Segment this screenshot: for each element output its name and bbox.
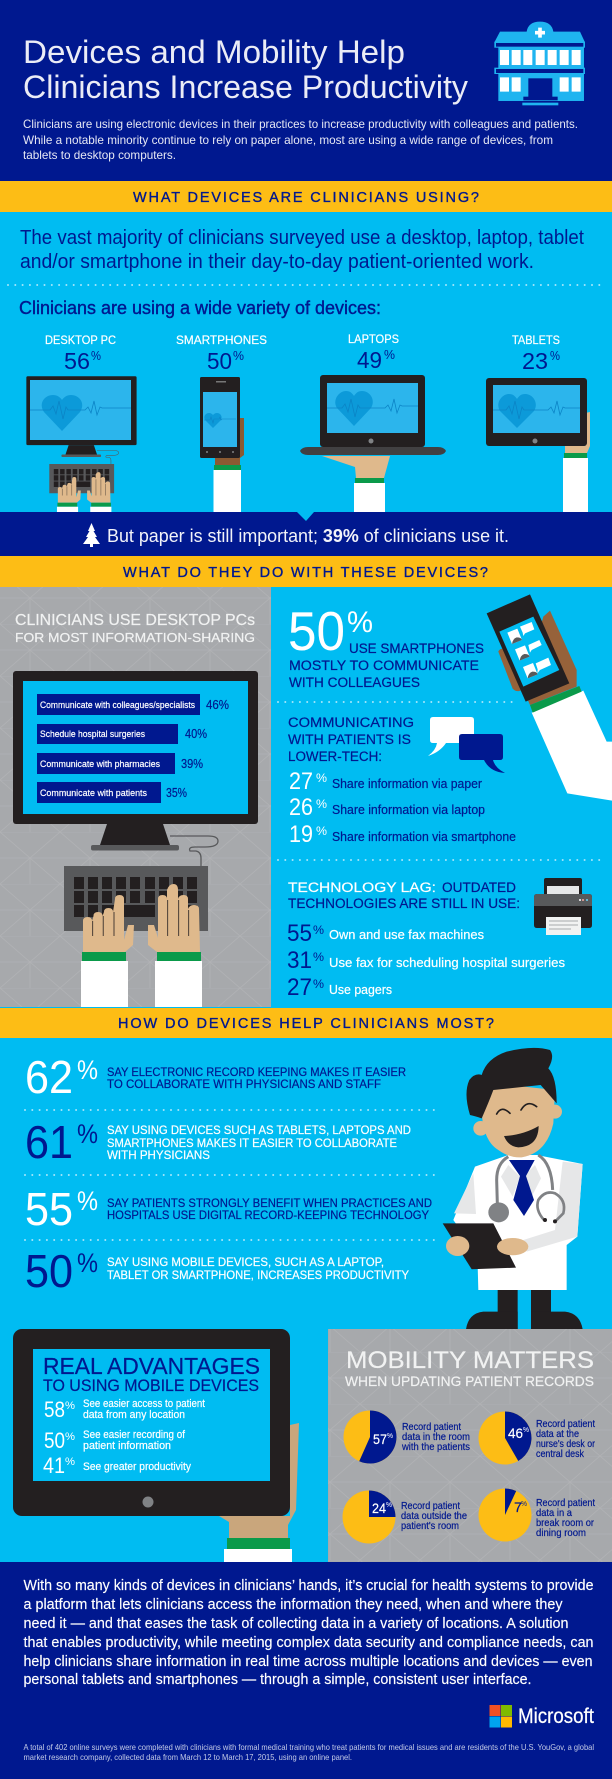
pie chart: break room: Record patient <box>536 1497 595 1509</box>
stats: patient communication: Share information via smartphone <box>332 830 516 844</box>
bar chart: 46% <box>206 698 229 712</box>
block: technology lag <box>287 878 592 1001</box>
stats: advantages: % <box>65 1400 75 1412</box>
pie chart: at the desk: % <box>523 1427 529 1434</box>
label: smartphones: 50 <box>207 348 232 374</box>
illustration: desktop with keyboard <box>26 376 137 527</box>
icon: speech bubbles <box>428 717 505 773</box>
pie chart: at the desk: 46 <box>508 1425 523 1441</box>
bar chart: Communicate with patients <box>40 788 147 799</box>
block: communicating with patients <box>288 715 516 848</box>
pie chart: outside the room: % <box>386 1502 392 1509</box>
label: laptops <box>348 332 399 373</box>
stats: patient communication: % <box>316 824 327 838</box>
heading: desktop pcs: FOR MOST INFORMATION-SHARING <box>15 631 255 645</box>
stat: fifty percent: SAY USING MOBILE DEVICES, SUCH AS A LAPTOP, <box>107 1255 384 1269</box>
title <box>23 34 469 105</box>
icon: fax machine <box>534 878 592 935</box>
intro text: tablets to desktop computers. <box>23 148 176 162</box>
footnote <box>24 1742 594 1762</box>
stats: advantages: % <box>65 1456 75 1468</box>
pie chart: in the room: with the patients <box>401 1441 470 1453</box>
bar chart: Communicate with colleagues/specialists <box>40 700 195 711</box>
bar chart <box>37 694 229 803</box>
label: tablets: TABLETS <box>512 333 560 347</box>
lead statement: and/or smartphone in their day-to-day patient-oriented work. <box>20 250 534 273</box>
pie chart: at the desk: Record patient <box>536 1418 595 1430</box>
panel: conclusion footer <box>0 1562 612 1779</box>
stat: sixty-one percent: SMARTPHONES MAKES IT EASIER TO COLLABORATE <box>107 1136 397 1150</box>
stat: sixty-two percent: % <box>77 1055 98 1085</box>
pie chart: at the desk: central desk <box>536 1448 585 1460</box>
heading: technology lag <box>288 880 520 911</box>
stats: technology lag: Use pagers <box>329 983 392 997</box>
stat: fifty-five percent: 55 <box>25 1183 73 1235</box>
bar chart: Communicate with pharmacies <box>40 759 160 770</box>
stat: fifty percent: % <box>77 1248 98 1278</box>
label: tablets: 23 <box>522 348 548 374</box>
stats: advantages: See greater productivity <box>83 1461 191 1473</box>
stat: fifty percent: 50 <box>25 1245 73 1297</box>
stats: patient communication: 19 <box>289 821 313 848</box>
title: Devices and Mobility Help <box>23 34 405 70</box>
stats: technology lag: Own and use fax machines <box>329 928 484 942</box>
label: laptops: LAPTOPS <box>348 332 399 346</box>
callout text: But paper is still important; 39% of clinicians use it. <box>107 526 509 546</box>
stats: patient communication: 27 <box>289 768 313 795</box>
stats: technology lag: % <box>313 950 324 964</box>
stat: sixty-two percent <box>25 1051 406 1103</box>
pie chart: outside the room: Record patient <box>401 1500 460 1512</box>
bar chart: 40% <box>185 727 207 741</box>
heading: real advantages <box>43 1353 260 1395</box>
pie chart: at the desk: data at the <box>536 1428 579 1440</box>
stat: sixty-one percent: SAY USING DEVICES SUCH AS TABLETS, LAPTOPS AND <box>107 1123 411 1137</box>
stats: technology lag <box>287 920 565 1001</box>
device: tablet <box>486 333 590 512</box>
pie chart: outside the room <box>342 1490 467 1544</box>
stat: sixty-two percent: SAY ELECTRONIC RECORD KEEPING MAKES IT EASIER <box>107 1065 406 1079</box>
illustration: phone in hand <box>200 377 244 512</box>
stats: patient communication <box>289 768 516 848</box>
heading: real advantages: TO USING MOBILE DEVICES <box>43 1376 259 1395</box>
stats: advantages: See easier recording of <box>83 1429 186 1441</box>
pie chart: at the desk: nurse's desk or <box>536 1438 595 1450</box>
label: desktop pc <box>45 333 116 374</box>
pie chart: break room: data in a <box>536 1507 572 1519</box>
conclusion text: that enables productivity, while meeting complex data security and compliance needs, can <box>24 1634 594 1651</box>
stats: advantages <box>43 1397 205 1478</box>
stats: technology lag: 27 <box>287 974 312 1001</box>
panel: header <box>0 0 612 181</box>
pie chart: outside the room: patient's room <box>401 1520 459 1532</box>
conclusion text: need it — and that eases the task of collecting data in a variety of locations. A solution <box>24 1615 568 1632</box>
label: smartphones: % <box>233 348 244 363</box>
stat: sixty-one percent: % <box>77 1119 98 1149</box>
bar chart: 35% <box>166 786 187 800</box>
stat: sixty-one percent: 61 <box>25 1116 73 1168</box>
pie chart: at the desk <box>478 1412 595 1464</box>
stats: patient communication: % <box>316 797 327 811</box>
stats: advantages: patient information <box>83 1440 171 1452</box>
heading: technology lag: TECHNOLOGIES ARE STILL IN USE: <box>288 896 520 911</box>
logo: microsoft <box>490 1705 594 1728</box>
stats: advantages: 50 <box>44 1428 65 1453</box>
stats: patient communication: Share information via paper <box>332 777 482 791</box>
label: smartphones <box>176 333 267 374</box>
label: desktop pc: 56 <box>64 348 90 374</box>
icon: hospital <box>494 22 585 105</box>
stats: technology lag: 31 <box>287 947 312 974</box>
stats: advantages: 41 <box>43 1453 65 1478</box>
heading: mobility matters: WHEN UPDATING PATIENT RECORDS <box>345 1373 594 1389</box>
pie chart: in the room <box>344 1410 470 1464</box>
pie chart: in the room: data in the room <box>402 1431 470 1443</box>
label: smartphones: SMARTPHONES <box>176 333 267 347</box>
stats: patient communication: Share information via laptop <box>332 803 485 817</box>
stat: fifty-five percent: SAY PATIENTS STRONGLY BENEFIT WHEN PRACTICES AND <box>107 1196 432 1210</box>
callout: paper still important <box>0 512 612 556</box>
panel: real advantages <box>0 1329 328 1562</box>
intro text: Clinicians are using electronic devices in their practices to increase productivity with colleagues and patients. <box>23 117 578 131</box>
label: laptops: % <box>384 347 395 362</box>
stats: patient communication: % <box>316 771 327 785</box>
stats: advantages: data from any location <box>83 1409 185 1421</box>
conclusion text: With so many kinds of devices in clinicians’ hands, it’s crucial for health systems to provide <box>24 1577 594 1594</box>
pie chart: break room: dining room <box>536 1527 586 1539</box>
pie chart: break room <box>478 1488 595 1542</box>
illustration: laptop on hand <box>300 375 446 512</box>
subpanel: desktop information sharing <box>13 612 258 1007</box>
footnote: market research company, collected data from March 12 to March 17, 2015, using an online panel. <box>24 1752 352 1762</box>
stat: fifty percent use smartphones: MOSTLY TO COMMUNICATE <box>289 658 479 673</box>
panel: what do they do with these devices <box>0 556 612 1007</box>
stats: technology lag: % <box>313 923 324 937</box>
panel: mobility matters <box>328 1329 612 1562</box>
illustration: desktop monitor and hands <box>13 671 258 1007</box>
device: smartphone <box>176 333 267 512</box>
label: tablets: % <box>550 348 560 363</box>
illustration: hand holding smartphone <box>487 594 612 801</box>
panel: how do devices help clinicians most <box>0 1008 612 1330</box>
intro text: While a notable minority continue to rely on paper alone, most are using a wide range of devices, from <box>23 133 553 147</box>
heading: what do they do: WHAT DO THEY DO WITH THESE DEVICES? <box>123 565 488 581</box>
stats: technology lag: Use fax for scheduling hospital surgeries <box>329 956 565 970</box>
heading: desktop pcs: CLINICIANS USE DESKTOP PCs <box>15 612 255 629</box>
heading: desktop pcs <box>15 612 255 645</box>
pie chart: in the room: Record patient <box>402 1421 461 1433</box>
stat: fifty percent use smartphones: USE SMARTPHONES <box>349 641 484 656</box>
stat: fifty-five percent: % <box>77 1186 98 1216</box>
heading: mobility matters <box>345 1347 594 1389</box>
pie chart: in the room: 57 <box>373 1431 387 1447</box>
icon: tree <box>83 523 100 547</box>
pie chart: break room: % <box>521 1501 527 1508</box>
heading: what devices: WHAT DEVICES ARE CLINICIANS USING? <box>133 190 479 206</box>
stat: sixty-two percent: TO COLLABORATE WITH PHYSICIANS AND STAFF <box>107 1077 381 1091</box>
label: tablets <box>512 333 560 374</box>
bar chart: Schedule hospital surgeries <box>40 729 145 740</box>
panel: what devices are clinicians using <box>0 181 612 527</box>
pie chart: break room: 7 <box>514 1499 522 1515</box>
pie chart: outside the room: data outside the <box>401 1510 467 1522</box>
stats: advantages: % <box>65 1431 75 1443</box>
heading: how do devices help: HOW DO DEVICES HELP CLINICIANS MOST? <box>118 1016 494 1032</box>
lead statement <box>20 226 584 273</box>
label: desktop pc: DESKTOP PC <box>45 333 116 347</box>
stat: sixty-one percent <box>25 1116 411 1168</box>
heading: lower tech <box>288 715 414 764</box>
conclusion text: a platform that lets clinicians access the information they need, when and where they <box>24 1596 563 1613</box>
pie chart: break room: break room or <box>536 1517 594 1529</box>
stat: fifty-five percent <box>25 1183 432 1235</box>
stat: fifty percent use smartphones: % <box>347 606 373 639</box>
heading: lower tech: WITH PATIENTS IS <box>288 732 411 747</box>
heading: technology lag: OUTDATED <box>442 880 516 895</box>
stat: fifty percent use smartphones: WITH COLLEAGUES <box>289 675 420 690</box>
stat: fifty percent use smartphones <box>288 600 484 690</box>
stats: technology lag: % <box>313 977 324 991</box>
label: laptops: 49 <box>357 347 382 373</box>
stat: sixty-one percent: WITH PHYSICIANS <box>107 1148 210 1162</box>
heading: lower tech: LOWER-TECH: <box>288 749 382 764</box>
heading: technology lag: TECHNOLOGY LAG: <box>288 880 436 895</box>
conclusion text: help clinicians share information in real time across multiple locations and devices — even <box>24 1653 592 1670</box>
conclusion text <box>24 1577 594 1688</box>
heading: mobility matters: MOBILITY MATTERS <box>346 1347 594 1374</box>
stat: fifty-five percent: HOSPITALS USE DIGITAL RECORD-KEEPING TECHNOLOGY <box>107 1208 429 1222</box>
illustration: doctor <box>443 1048 583 1330</box>
pie chart: in the room: % <box>387 1433 393 1440</box>
logo: microsoft: Microsoft <box>518 1705 594 1728</box>
label: desktop pc: % <box>91 348 101 363</box>
conclusion text: personal tablets and smartphones — through a simple, consistent user interface. <box>24 1671 532 1688</box>
intro text <box>23 117 578 162</box>
device: laptop <box>300 332 446 512</box>
stats: technology lag: 55 <box>287 920 312 947</box>
illustration: tablet in hand <box>486 378 590 512</box>
stat: sixty-two percent: 62 <box>25 1051 73 1103</box>
title: Clinicians Increase Productivity <box>23 69 469 105</box>
stat: fifty percent <box>25 1245 409 1297</box>
bar chart: 39% <box>181 757 203 771</box>
stat: fifty percent: TABLET OR SMARTPHONE, INCREASES PRODUCTIVITY <box>107 1268 409 1282</box>
stat: fifty percent use smartphones: 50 <box>288 600 345 662</box>
illustration: hand holding tablet <box>13 1329 299 1562</box>
heading: real advantages: REAL ADVANTAGES <box>43 1353 260 1379</box>
heading: lower tech: COMMUNICATING <box>288 715 414 730</box>
stats: advantages: See easier access to patient <box>83 1398 205 1410</box>
device: desktop <box>26 333 137 527</box>
subheading: Clinicians are using a wide variety of devices: <box>19 298 381 318</box>
pie chart: outside the room: 24 <box>372 1500 386 1516</box>
stats: patient communication: 26 <box>289 794 313 821</box>
stats: advantages: 58 <box>44 1397 65 1422</box>
